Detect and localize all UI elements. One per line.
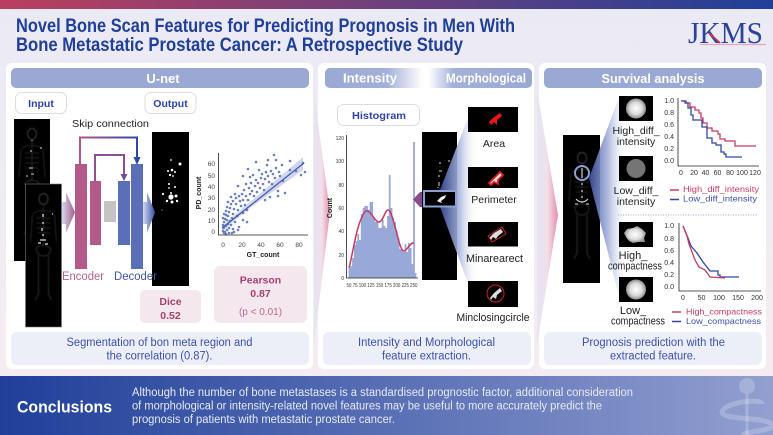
thumbnail: high diff intensity: [619, 96, 653, 121]
title: Novel Bone Scan Features for Predicting Prognosis in Men With: [16, 16, 515, 37]
full body scan: [563, 135, 600, 283]
histogram chart: 40: [338, 229, 344, 235]
survival chart: compactness: 50: [698, 295, 705, 302]
survival chart: intensity: 0: [679, 170, 683, 177]
histogram button: Histogram: [352, 110, 406, 122]
skip connection arrows: [80, 138, 140, 181]
feature heading: [325, 68, 532, 88]
conclusions heading: Conclusions: [17, 398, 112, 416]
bottleneck bar: [104, 201, 116, 222]
survival chart: compactness: 0.0: [664, 284, 674, 291]
survival chart: compactness: 0.8: [664, 236, 674, 243]
title: Bone Metastatic Prostate Cancer: A Retrospective Study: [16, 35, 463, 56]
feature heading: Intensity: [343, 72, 397, 86]
logo: JKMS: JKMS: [688, 15, 763, 50]
arrow: decoder to output: [143, 192, 155, 233]
caption: survival: extracted feature.: [610, 350, 696, 362]
label: high diff intensity: High_diff_: [612, 125, 660, 137]
scatter plot: 20: [238, 242, 246, 249]
thumbnail: minclosingcircle: [468, 281, 518, 307]
scatter plot: 30: [208, 195, 215, 202]
scatter plot: 80: [295, 242, 303, 249]
panel: conclusions: [0, 376, 773, 435]
scatter plot: 20: [208, 207, 215, 214]
survival chart: compactness: 0.6: [664, 248, 674, 255]
segmented scan: [422, 132, 457, 280]
legend: compactness: High_compactness: [686, 306, 762, 316]
survival chart: compactness: 100: [713, 295, 725, 302]
survival chart: intensity: 0.0: [664, 158, 674, 165]
encoder bars: [75, 164, 101, 269]
scatter plot: 0: [221, 242, 225, 249]
histogram chart: 20: [338, 253, 344, 259]
encoder label: Encoder: [62, 271, 104, 283]
label: high compactness: High_: [619, 250, 648, 262]
survival chart: intensity: 120: [749, 170, 761, 177]
label: area: Area: [483, 138, 505, 150]
input bone scans: [14, 119, 62, 327]
dice box: Dice: [159, 296, 182, 308]
arrow: scan to histogram: [413, 192, 422, 207]
dice box: [140, 290, 201, 323]
title: [16, 16, 515, 56]
panel: U-net: [6, 63, 313, 369]
scatter plot: 40: [208, 184, 215, 191]
thumbnail: area: [468, 107, 518, 132]
label: low diff intensity: intensity: [617, 196, 656, 208]
survival chart: intensity: 100: [736, 170, 748, 177]
thumbnail: low diff intensity: [619, 156, 653, 181]
dotted divider: [618, 214, 758, 216]
output button: Output: [153, 98, 188, 110]
histogram chart: 60: [338, 206, 344, 212]
panel: feature extraction: [314, 63, 534, 369]
label: low compactness: compactness: [611, 316, 665, 328]
legend: intensity: High_diff_intensity: [683, 184, 760, 194]
thumbnail: minarearect: [468, 222, 518, 246]
marker circle on scan: [575, 166, 589, 180]
conclusions text: Although the number of bone metastases is a standardised prognostic factor, additional consideration: [132, 387, 633, 399]
caption: features: feature extraction.: [382, 350, 471, 362]
scatter plot: PD_count: [196, 176, 203, 209]
thumbnail: low compactness: [619, 277, 653, 302]
input button: Input: [28, 98, 54, 110]
arrow: U-net to features: [314, 92, 330, 345]
caption: U-net: Segmentation of bon meta region and: [66, 337, 252, 349]
pearson box: Pearson: [240, 274, 281, 286]
survival chart: intensity: 60: [714, 170, 721, 177]
caption: features: [323, 332, 531, 365]
legend: intensity: Low_diff_intensity: [683, 194, 758, 204]
dice box: 0.52: [160, 310, 181, 322]
legend: compactness: [672, 306, 762, 326]
scatter plot: GT_count: [247, 252, 280, 259]
survival chart: intensity: 40: [702, 170, 709, 177]
input button: [16, 92, 66, 114]
label: high compactness: [608, 250, 662, 272]
scatter plot: 10: [208, 218, 215, 225]
histogram chart: 80: [338, 183, 344, 189]
feature heading: Morphological: [446, 72, 526, 86]
arrow: input to encoder: [62, 192, 75, 233]
histogram chart: [327, 135, 418, 289]
survival chart: intensity: 20: [690, 170, 698, 177]
output segmentation scan: [152, 132, 189, 286]
skip connection label: Skip connection: [72, 118, 149, 130]
histogram chart: 120: [336, 136, 344, 142]
survival heading: [544, 68, 762, 88]
label: perimeter: Perimeter: [471, 194, 517, 206]
survival chart: intensity: 1.0: [664, 98, 674, 105]
survival chart: intensity: 0.6: [664, 122, 674, 129]
conclusions text: prognosis of patients with metastatic prostate cancer.: [132, 414, 395, 426]
arrow: features to survival: [537, 90, 558, 345]
conclusions text: [132, 387, 633, 426]
caption: survival: Prognosis prediction with the: [582, 337, 725, 349]
label: low compactness: [611, 305, 665, 328]
survival heading: Survival analysis: [602, 71, 704, 86]
panel: survival analysis: [537, 63, 766, 369]
caption: U-net: the correlation (0.87).: [106, 350, 212, 362]
fan: crop to morphological features: [440, 118, 478, 283]
label: minclosingcircle: Minclosingcircle: [456, 312, 530, 324]
scatter plot: 60: [276, 242, 284, 249]
survival chart: compactness: 0.2: [664, 272, 674, 279]
legend: intensity: [670, 184, 760, 204]
label: high diff intensity: [612, 125, 660, 148]
survival chart: compactness: 200: [751, 295, 763, 302]
thumbnail: high compactness: [619, 222, 653, 247]
survival chart: intensity: 0.4: [664, 134, 674, 141]
legend: compactness: Low_compactness: [686, 316, 761, 326]
top gradient bar: [0, 0, 773, 9]
thumbnail: perimeter: [468, 167, 518, 188]
fan: scan to thumbnails: [589, 100, 628, 292]
label: high compactness: compactness: [608, 260, 662, 272]
survival chart: intensity: 80: [726, 170, 734, 177]
scatter plot: 40: [257, 242, 265, 249]
pearson box: [214, 266, 307, 323]
histogram chart: 0: [341, 276, 344, 282]
label: minarearect: Minarearect: [466, 253, 523, 265]
label: low diff intensity: Low_diff_: [614, 185, 659, 197]
scatter plot: 60: [208, 161, 215, 168]
survival chart: compactness: 0.4: [664, 260, 674, 267]
survival chart: intensity: 0.2: [664, 146, 674, 153]
caption: features: Intensity and Morphological: [358, 337, 495, 349]
decoder label: Decoder: [114, 271, 157, 283]
caption: survival: [544, 332, 762, 365]
histogram chart: Count: [327, 197, 334, 218]
U-net heading: [11, 68, 309, 88]
survival chart: compactness: [664, 223, 763, 302]
decoder bars: [118, 164, 143, 269]
caption: U-net: [11, 332, 309, 365]
pearson box: (p < 0.01): [239, 307, 282, 318]
conclusions text: of morphological or intensity-related novel features may be useful to more accurately predict the: [132, 400, 602, 412]
label: low compactness: Low_: [620, 305, 647, 317]
histogram chart: 50 75 100 125 150 175 200 225 250: [346, 283, 418, 289]
histogram chart: 100: [336, 159, 344, 165]
output button: [145, 92, 196, 114]
U-net heading: U-net: [146, 71, 180, 86]
label: low diff intensity: [614, 185, 659, 208]
scatter plot: 0: [211, 229, 215, 236]
scatter plot: 50: [208, 173, 215, 180]
label: high diff intensity: intensity: [617, 136, 656, 148]
survival chart: compactness: 0: [681, 295, 685, 302]
crop box on scan: [424, 191, 456, 206]
survival chart: intensity: 0.8: [664, 110, 674, 117]
survival chart: compactness: 1.0: [664, 223, 674, 230]
pearson box: 0.87: [250, 288, 271, 300]
scatter plot: [196, 153, 308, 259]
survival chart: intensity: [664, 98, 761, 177]
survival chart: compactness: 150: [732, 295, 744, 302]
histogram button: [338, 104, 420, 126]
icon: caduceus watermark: [722, 378, 772, 435]
